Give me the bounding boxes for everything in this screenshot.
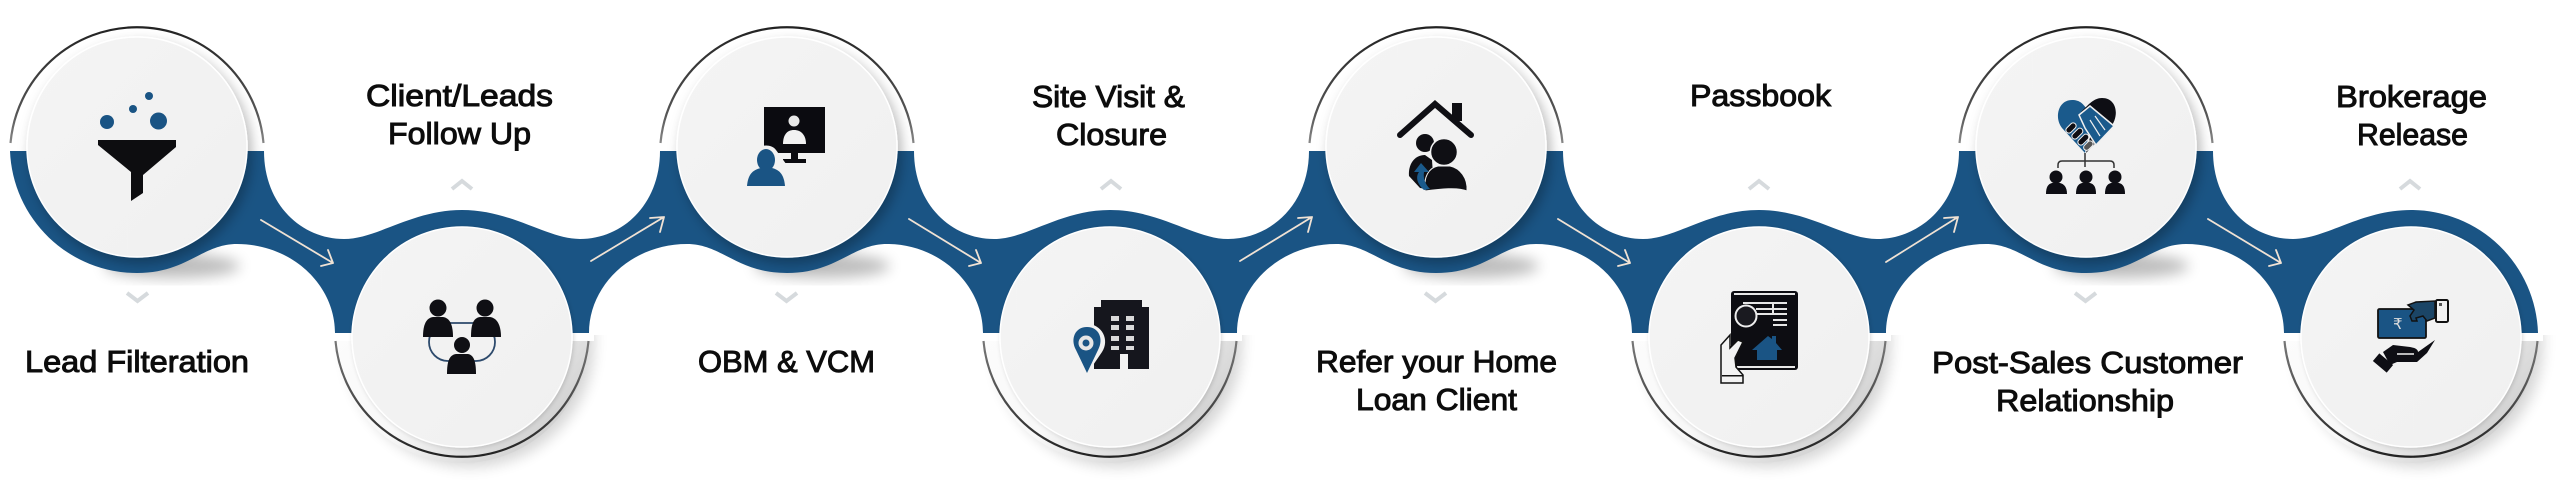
- icon: building with location pin: [1072, 300, 1149, 374]
- white circle: [1649, 227, 1869, 447]
- label: Site Visit & Closure: Site Visit &: [1032, 79, 1185, 114]
- white circle: [677, 37, 897, 257]
- icon: three connected people: [423, 300, 501, 374]
- icon: funnel with bubbles: [98, 92, 176, 201]
- label: Passbook: Passbook: [1690, 78, 1832, 113]
- icon: video call monitor: [742, 107, 825, 190]
- label: Refer your Home Loan Client: Loan Client: [1356, 382, 1517, 417]
- bottom arc: [2284, 341, 2538, 457]
- chevron: [1425, 293, 1446, 301]
- chevron: [2075, 293, 2096, 301]
- label: Lead Filteration: Lead Filteration: [25, 344, 249, 379]
- label: Refer your Home Loan Client: Refer your Home: [1316, 344, 1557, 379]
- icon: passbook held in hand: [1721, 291, 1798, 383]
- bottom arc: [984, 341, 1236, 457]
- white circle: [1326, 37, 1546, 257]
- soft shadows under the ribbon: [104, 254, 2189, 278]
- step 8: [2284, 79, 2538, 457]
- icon: handshake heart over team: [2046, 98, 2125, 194]
- label: Post-Sales Customer Relationship: Relationship: [1996, 383, 2174, 418]
- arrows between steps: [261, 217, 2281, 266]
- chevron: [1101, 181, 1121, 189]
- white circle: [2301, 227, 2521, 447]
- label: Client/Leads Follow Up: [366, 78, 553, 151]
- top arc: [660, 27, 914, 143]
- blue ribbon connecting the steps: [10, 151, 2538, 333]
- step 5: [1310, 27, 1562, 417]
- label: Site Visit & Closure: Closure: [1056, 117, 1167, 152]
- step 4: [984, 79, 1236, 457]
- step 1: [10, 27, 264, 379]
- label: Site Visit & Closure: [1032, 79, 1185, 152]
- top arc: [1960, 27, 2212, 143]
- icon: house with people: [1400, 103, 1471, 191]
- chevron: [776, 293, 797, 301]
- label: OBM & VCM: OBM & VCM: [698, 344, 875, 379]
- label: Client/Leads Follow Up: Follow Up: [388, 116, 531, 151]
- white circle: [1976, 37, 2196, 257]
- chevron: [127, 293, 148, 301]
- label: Post-Sales Customer Relationship: [1932, 345, 2243, 418]
- white circle: [1000, 227, 1220, 447]
- white circle: [27, 37, 247, 257]
- icon: rupee card passing between hands: [2373, 300, 2448, 373]
- top arc: [1310, 27, 1562, 143]
- step 3: [660, 27, 914, 379]
- lower discs with soft shadow: [364, 335, 2548, 472]
- chevron: [1749, 181, 1769, 189]
- label: Brokerage Release: [2336, 79, 2487, 152]
- step 2: [336, 78, 588, 457]
- label: Refer your Home Loan Client: [1316, 344, 1557, 417]
- top arc: [10, 27, 264, 143]
- step 6: [1632, 78, 1886, 457]
- label: Brokerage Release: Release: [2357, 117, 2468, 152]
- bottom arc: [336, 341, 588, 457]
- label: Brokerage Release: Brokerage: [2336, 79, 2487, 114]
- icon: rupee card passing between hands: ₹: [2393, 315, 2403, 333]
- label: Client/Leads Follow Up: Client/Leads: [366, 78, 553, 113]
- chevron: [2400, 181, 2420, 189]
- label: Post-Sales Customer Relationship: Post-Sales Customer: [1932, 345, 2243, 380]
- bottom arc: [1632, 341, 1886, 457]
- white circle: [352, 227, 572, 447]
- step 7: [1932, 27, 2243, 418]
- chevron: [452, 181, 472, 189]
